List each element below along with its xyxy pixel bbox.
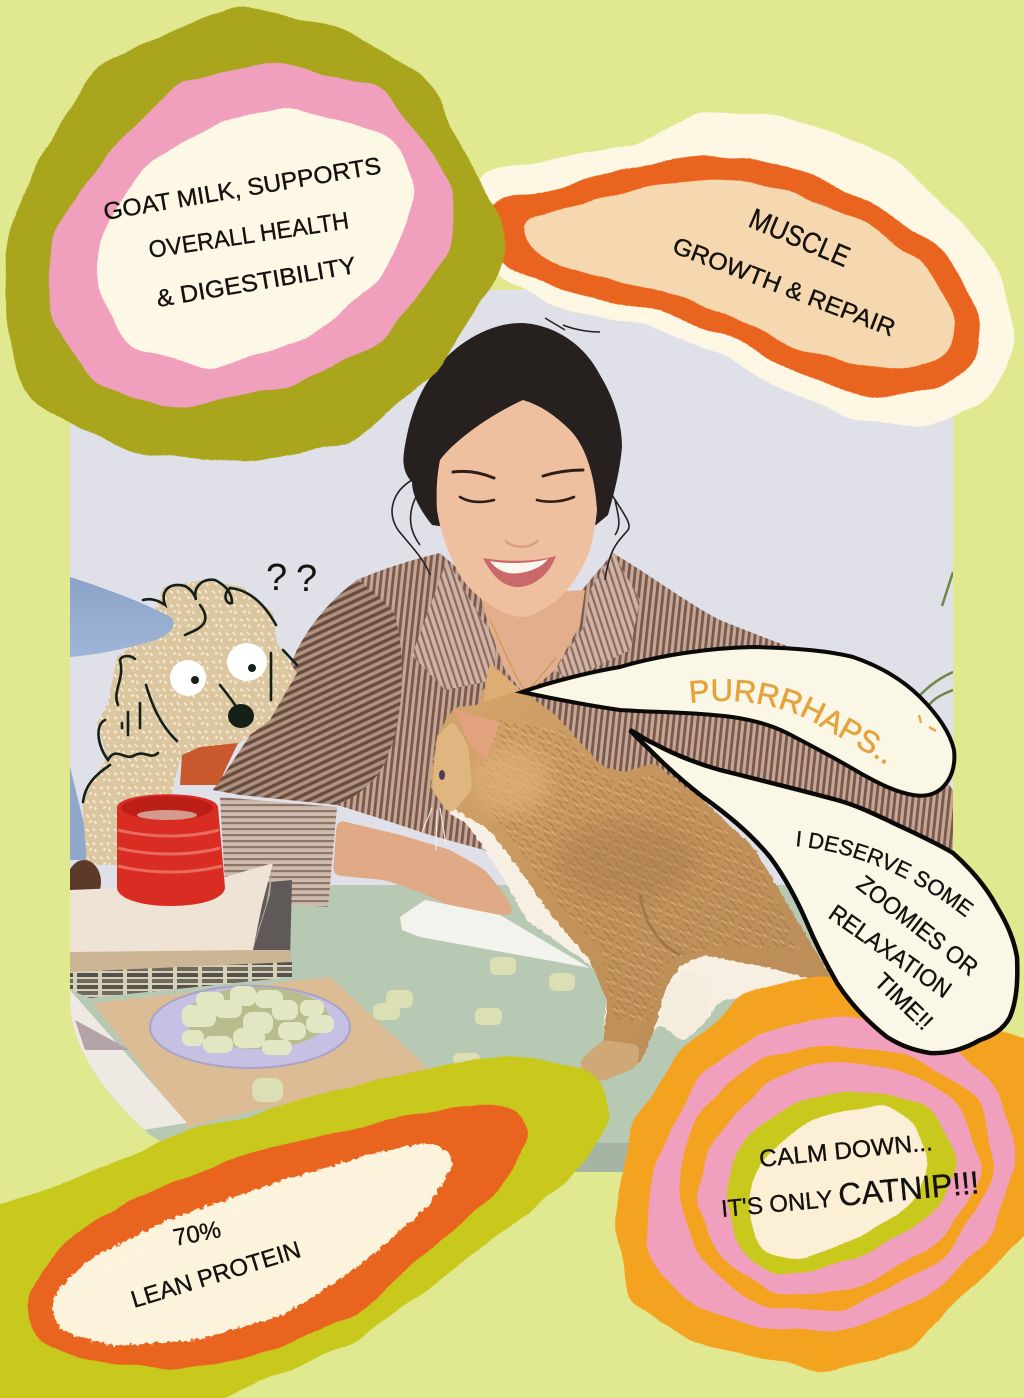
dog tongue: [180, 743, 238, 785]
text: zoomies: RELAXATION: [824, 900, 956, 1004]
text: zoomies: TIME!!: [869, 968, 938, 1036]
necklace: [490, 620, 556, 692]
text: zoomies: [796, 831, 983, 1036]
pinecone: [70, 860, 101, 890]
tan cover strip: [70, 950, 290, 972]
spiral notebook: [70, 962, 292, 998]
text: goat milk: & DIGESTIBILITY: [154, 252, 358, 313]
notebook: [400, 900, 590, 968]
blob ring yellow green: [726, 1089, 958, 1276]
cat fur body: [430, 663, 835, 1065]
text: catnip: [719, 1129, 981, 1224]
hair: [403, 323, 622, 527]
cat shading: [555, 820, 695, 900]
blob centre peach: [516, 180, 955, 369]
cat front paw: [580, 1040, 640, 1082]
cat eye: [439, 770, 445, 780]
book spine: [253, 863, 273, 950]
dog pupils and nose: [191, 664, 256, 728]
plant: [920, 572, 953, 706]
text: zoomies: ZOOMIES OR: [851, 870, 983, 982]
text: muscle: GROWTH & REPAIR: [669, 232, 899, 342]
text: catnip: IT'S ONLY CATNIP!!!: [719, 1164, 981, 1224]
dog illustration: [82, 557, 317, 865]
blob ring orange: [487, 157, 980, 396]
blob ring inner orange: [678, 1046, 994, 1311]
blob: muscle: [476, 113, 1015, 425]
question marks: ?: [266, 557, 287, 599]
text: goat milk: GOAT MILK, SUPPORTS: [101, 152, 383, 226]
text: goat milk: OVERALL HEALTH: [147, 207, 351, 264]
blob: catnip: [615, 974, 1024, 1372]
cat rear leg: [660, 968, 712, 1042]
scattered treats: [252, 957, 575, 1102]
collar left: [412, 560, 495, 690]
blob: lean protein: [0, 1055, 612, 1398]
forearm and hand: [333, 820, 515, 915]
dog outlines: [83, 580, 297, 802]
cat ear front: [453, 708, 500, 760]
shirt left sleeve: [213, 580, 402, 805]
blob centre cream: [96, 109, 418, 368]
blob centre cream: [50, 1142, 456, 1345]
blob ring olive: [6, 6, 502, 462]
text: muscle: MUSCLE: [744, 203, 854, 274]
cat face: [432, 720, 472, 815]
table: [70, 885, 831, 1143]
face: [437, 400, 597, 617]
dark book: [253, 880, 292, 958]
cat rear haunch crease: [640, 895, 680, 955]
text: zoomies: I DESERVE SOME: [796, 831, 974, 918]
neck and chest: [480, 590, 585, 695]
cat ear back: [483, 663, 520, 702]
kraft paper mat: [93, 977, 430, 1127]
cat fur texture: [480, 720, 800, 1020]
text: lean protein: 70%: [171, 1216, 223, 1252]
cream book: [70, 863, 273, 952]
magazine picture: [75, 1020, 130, 1050]
text: lean protein: LEAN PROTEIN: [128, 1236, 304, 1314]
lamp shade: [70, 577, 173, 657]
cat: [422, 663, 840, 1082]
dog eyes: [170, 643, 267, 696]
blob ring pink: [49, 63, 452, 408]
photo: woman with cat at table: [67, 290, 953, 1172]
blob ring yellow olive: [0, 1055, 612, 1398]
plate of treats: [150, 986, 350, 1068]
text: goat milk: [101, 152, 383, 313]
blob ring outer orange: [615, 974, 1024, 1372]
red cup: [117, 794, 225, 906]
question marks: [268, 564, 316, 591]
blob: goat milk: [6, 6, 502, 462]
bubble shape: [522, 647, 954, 796]
question marks: ?: [296, 558, 317, 600]
magazine: [70, 990, 187, 1130]
speech bubble: zoomies: [628, 728, 1020, 1056]
cat neck highlight: [470, 745, 550, 815]
shirt body: [213, 553, 953, 860]
blob ring inner pink: [696, 1061, 981, 1294]
blob ring cream: [476, 113, 1015, 425]
smile: [483, 556, 556, 587]
collar right: [555, 553, 640, 680]
bubble shape: [630, 730, 1017, 1053]
shirt cuff: [220, 797, 337, 907]
text: catnip: CALM DOWN...: [758, 1129, 934, 1173]
woman: [213, 318, 953, 915]
speech bubble: purrrhaps: [514, 645, 956, 798]
text: purrrhaps: PURRRHAPS..: [690, 679, 886, 764]
teeth: [490, 559, 548, 573]
blob centre cream: [748, 1103, 930, 1259]
table front edge: [574, 1143, 628, 1172]
hair wisps: [392, 318, 629, 580]
eyes and brows: [453, 470, 583, 502]
wall: [70, 290, 953, 910]
nose: [505, 540, 538, 547]
dog body: [82, 580, 297, 865]
lamp stem: [70, 767, 87, 860]
cat white underside: [440, 800, 840, 1050]
blob ring orange: [26, 1106, 532, 1370]
blob ring pink: [649, 1016, 1018, 1331]
sparkle marks: [919, 715, 936, 731]
cat whiskers: [422, 808, 446, 850]
